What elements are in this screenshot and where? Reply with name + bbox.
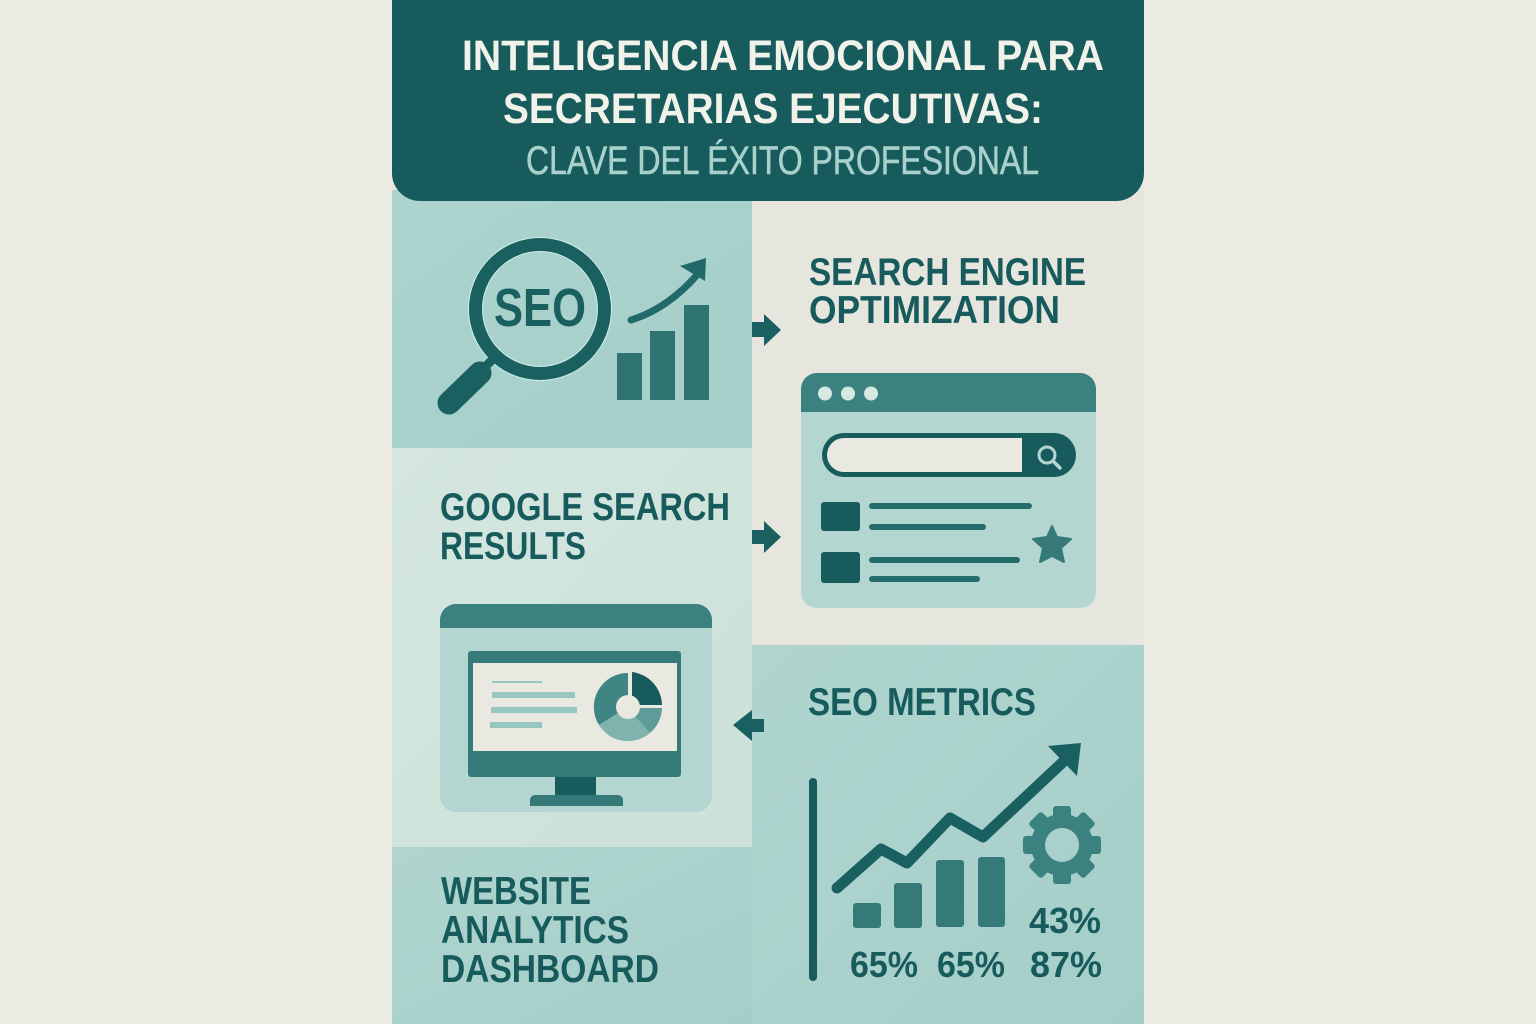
- panel: Google search results: [392, 448, 752, 847]
- heading: website analytics dashboard: [441, 870, 659, 991]
- metric values: 65%: [850, 944, 918, 985]
- trend arrow: [837, 743, 1081, 888]
- poster background: [392, 0, 1144, 1024]
- heading: website analytics dashboard: ANALYTICS: [441, 909, 629, 952]
- panel: website analytics dashboard: [392, 847, 752, 1024]
- heading: Google search results: GOOGLE SEARCH: [440, 486, 730, 529]
- illustration: browser with search results: [801, 373, 1096, 608]
- metric values: 65%: [937, 944, 1005, 985]
- chart: donut pie: [594, 672, 662, 741]
- title banner: [392, 0, 1144, 201]
- heading: search engine optimization: [809, 251, 1086, 332]
- panel: SEO metrics: [752, 645, 1144, 1024]
- heading: Google search results: RESULTS: [440, 525, 586, 568]
- subtitle: CLAVE DEL ÉXITO PROFESIONAL: [526, 138, 1039, 183]
- arrow: SEO metrics to dashboard: [733, 710, 764, 741]
- illustration: analytics monitor: [440, 604, 712, 812]
- heading: website analytics dashboard: DASHBOARD: [441, 948, 659, 991]
- title line 1: INTELIGENCIA EMOCIONAL PARA: [462, 32, 1104, 80]
- panel: SEO icon: [392, 190, 752, 448]
- icon: SEO magnifying glass: [449, 244, 604, 403]
- icon: growth bars with arrow: [617, 258, 709, 400]
- arrow: SEO to search engine optimization: [752, 314, 781, 346]
- heading: website analytics dashboard: WEBSITE: [441, 870, 591, 913]
- heading: search engine optimization: SEARCH ENGINE: [809, 251, 1086, 294]
- metric values: [850, 900, 1102, 985]
- chart axis: [809, 782, 817, 977]
- heading: search engine optimization: OPTIMIZATION: [809, 289, 1060, 332]
- arrow: Google results to browser: [752, 521, 781, 553]
- icon: SEO magnifying glass: SEO: [494, 278, 586, 338]
- title line 2: SECRETARIAS EJECUTIVAS:: [503, 85, 1043, 133]
- heading: Google search results: [440, 486, 730, 568]
- chart bars: [853, 857, 1005, 928]
- heading: SEO metrics: SEO METRICS: [808, 681, 1036, 724]
- metric values: 87%: [1030, 944, 1102, 985]
- metric values: 43%: [1029, 900, 1101, 941]
- icon: gear: [1023, 806, 1101, 884]
- chart: SEO metrics: [813, 743, 1102, 985]
